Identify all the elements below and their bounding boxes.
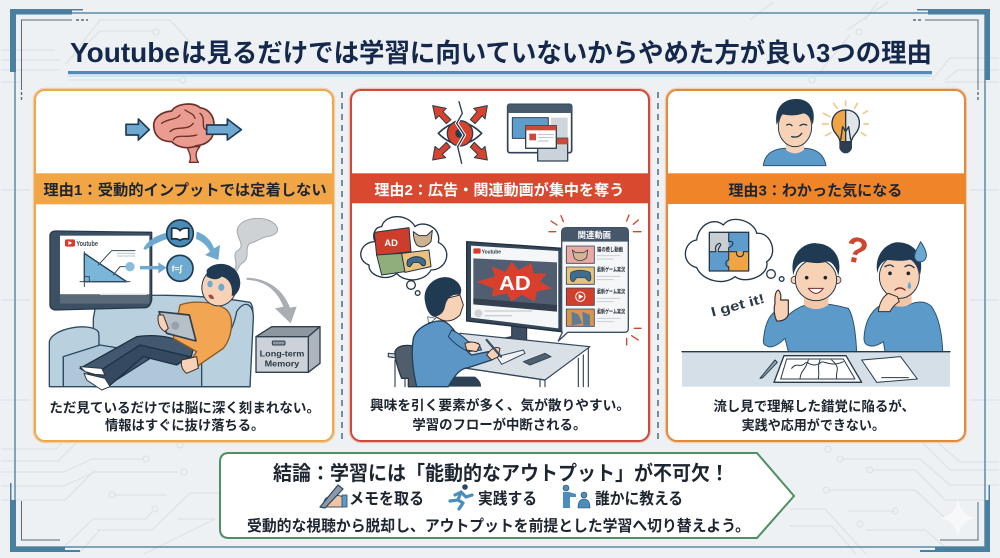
illustration: sofa learner bbox=[49, 218, 320, 390]
banner: reason 1: 理由1：受動的インプットでは定着しない bbox=[43, 181, 327, 199]
related videos list: 最新ゲーム実況 bbox=[597, 308, 625, 316]
text: reason 2 caption bbox=[370, 397, 630, 432]
icon: book and formula bbox=[140, 220, 220, 281]
text: reason 1 caption: 情報はすぐに抜け落ちる。 bbox=[105, 417, 264, 433]
text: reason 2 caption: 興味を引く要素が多く、気が散りやすい。 bbox=[370, 397, 630, 413]
box label: long-term memory: Long-term bbox=[260, 350, 304, 359]
icon: browser windows bbox=[508, 104, 572, 161]
related videos list: 最新ゲーム実況 bbox=[597, 266, 625, 274]
monitor with ad bbox=[467, 242, 562, 348]
conclusion sentence: 受動的な視聴から脱却し、アウトプットを前提とした学習へ切り替えよう。 bbox=[247, 516, 750, 535]
conclusion heading: 結論：学習には「能動的なアウトプット」が不可欠！ bbox=[273, 461, 729, 485]
title bbox=[68, 37, 932, 77]
banner: reason 1 bbox=[35, 173, 333, 204]
box: long-term memory bbox=[256, 327, 320, 372]
icon: half lit bulb bbox=[823, 101, 868, 153]
icon: question mark: ? bbox=[842, 228, 872, 272]
arrow: down to memory bbox=[247, 278, 297, 323]
banner: reason 3: 理由3：わかった気になる bbox=[728, 182, 902, 200]
thought bubble: puzzle bbox=[685, 219, 784, 282]
action: practice: 実践する bbox=[478, 490, 537, 508]
action: take notes: メモを取る bbox=[349, 490, 424, 508]
title: Youtube bbox=[70, 37, 180, 68]
related videos heading: 関連動画 bbox=[578, 230, 611, 240]
title: は見るだけでは学習に向いていないからやめた方が良い3つの理由 bbox=[181, 38, 932, 68]
tablet screen bbox=[50, 231, 152, 310]
monitor label: Youtube: Youtube bbox=[482, 250, 501, 256]
banner: reason 3 bbox=[667, 173, 965, 204]
boy: confident bbox=[763, 243, 857, 352]
text: reason 1 caption: ただ見ているだけでは脳に深く刻まれない。 bbox=[49, 400, 320, 415]
conclusion arrow box bbox=[220, 453, 794, 538]
monitor label: AD: AD bbox=[499, 272, 531, 295]
speech: I get it: I get it! bbox=[709, 291, 766, 320]
panel: reason 1 bbox=[35, 90, 333, 441]
text: reason 3 caption bbox=[713, 398, 915, 433]
box label: long-term memory: Memory bbox=[265, 360, 300, 369]
related videos list bbox=[597, 246, 625, 316]
icon: smug person bbox=[763, 99, 826, 166]
formula label: f=∫ bbox=[172, 264, 184, 274]
related videos list: 最新ゲーム実況 bbox=[597, 288, 625, 296]
text: reason 3 caption: 流し見で理解した錯覚に陥るが、 bbox=[713, 398, 915, 414]
sparkle bbox=[940, 499, 976, 537]
text: reason 1 caption bbox=[49, 400, 320, 433]
panel: related videos bbox=[558, 228, 628, 341]
panel: reason 3 bbox=[667, 90, 965, 441]
related videos list: 猫の癒し動画 bbox=[597, 246, 623, 254]
box label: long-term memory bbox=[260, 350, 304, 369]
text: reason 2 caption: 学習のフローが中断される。 bbox=[412, 416, 586, 432]
icon: brain with arrows bbox=[126, 104, 241, 162]
person bbox=[80, 264, 241, 390]
text: reason 3 caption: 実践や応用ができない。 bbox=[742, 417, 885, 433]
icon: distracted eye bbox=[433, 102, 487, 163]
action: teach someone: 誰かに教える bbox=[595, 489, 683, 508]
banner: reason 2: 理由2：広告・関連動画が集中を奪う bbox=[374, 181, 624, 199]
boy: worried bbox=[864, 242, 943, 352]
icon: runner bbox=[450, 484, 472, 509]
banner: reason 2 bbox=[351, 173, 649, 203]
screen label: Youtube: Youtube bbox=[76, 241, 98, 248]
icon: teaching bbox=[563, 485, 590, 508]
icon: hand writing bbox=[320, 485, 347, 508]
table with puzzle bbox=[682, 352, 950, 387]
smoke bbox=[234, 218, 278, 273]
bubble label: AD: AD bbox=[384, 238, 398, 248]
panel: reason 2 bbox=[351, 90, 649, 441]
desk and person bbox=[388, 277, 590, 387]
thought bubble: distractions bbox=[361, 217, 447, 295]
